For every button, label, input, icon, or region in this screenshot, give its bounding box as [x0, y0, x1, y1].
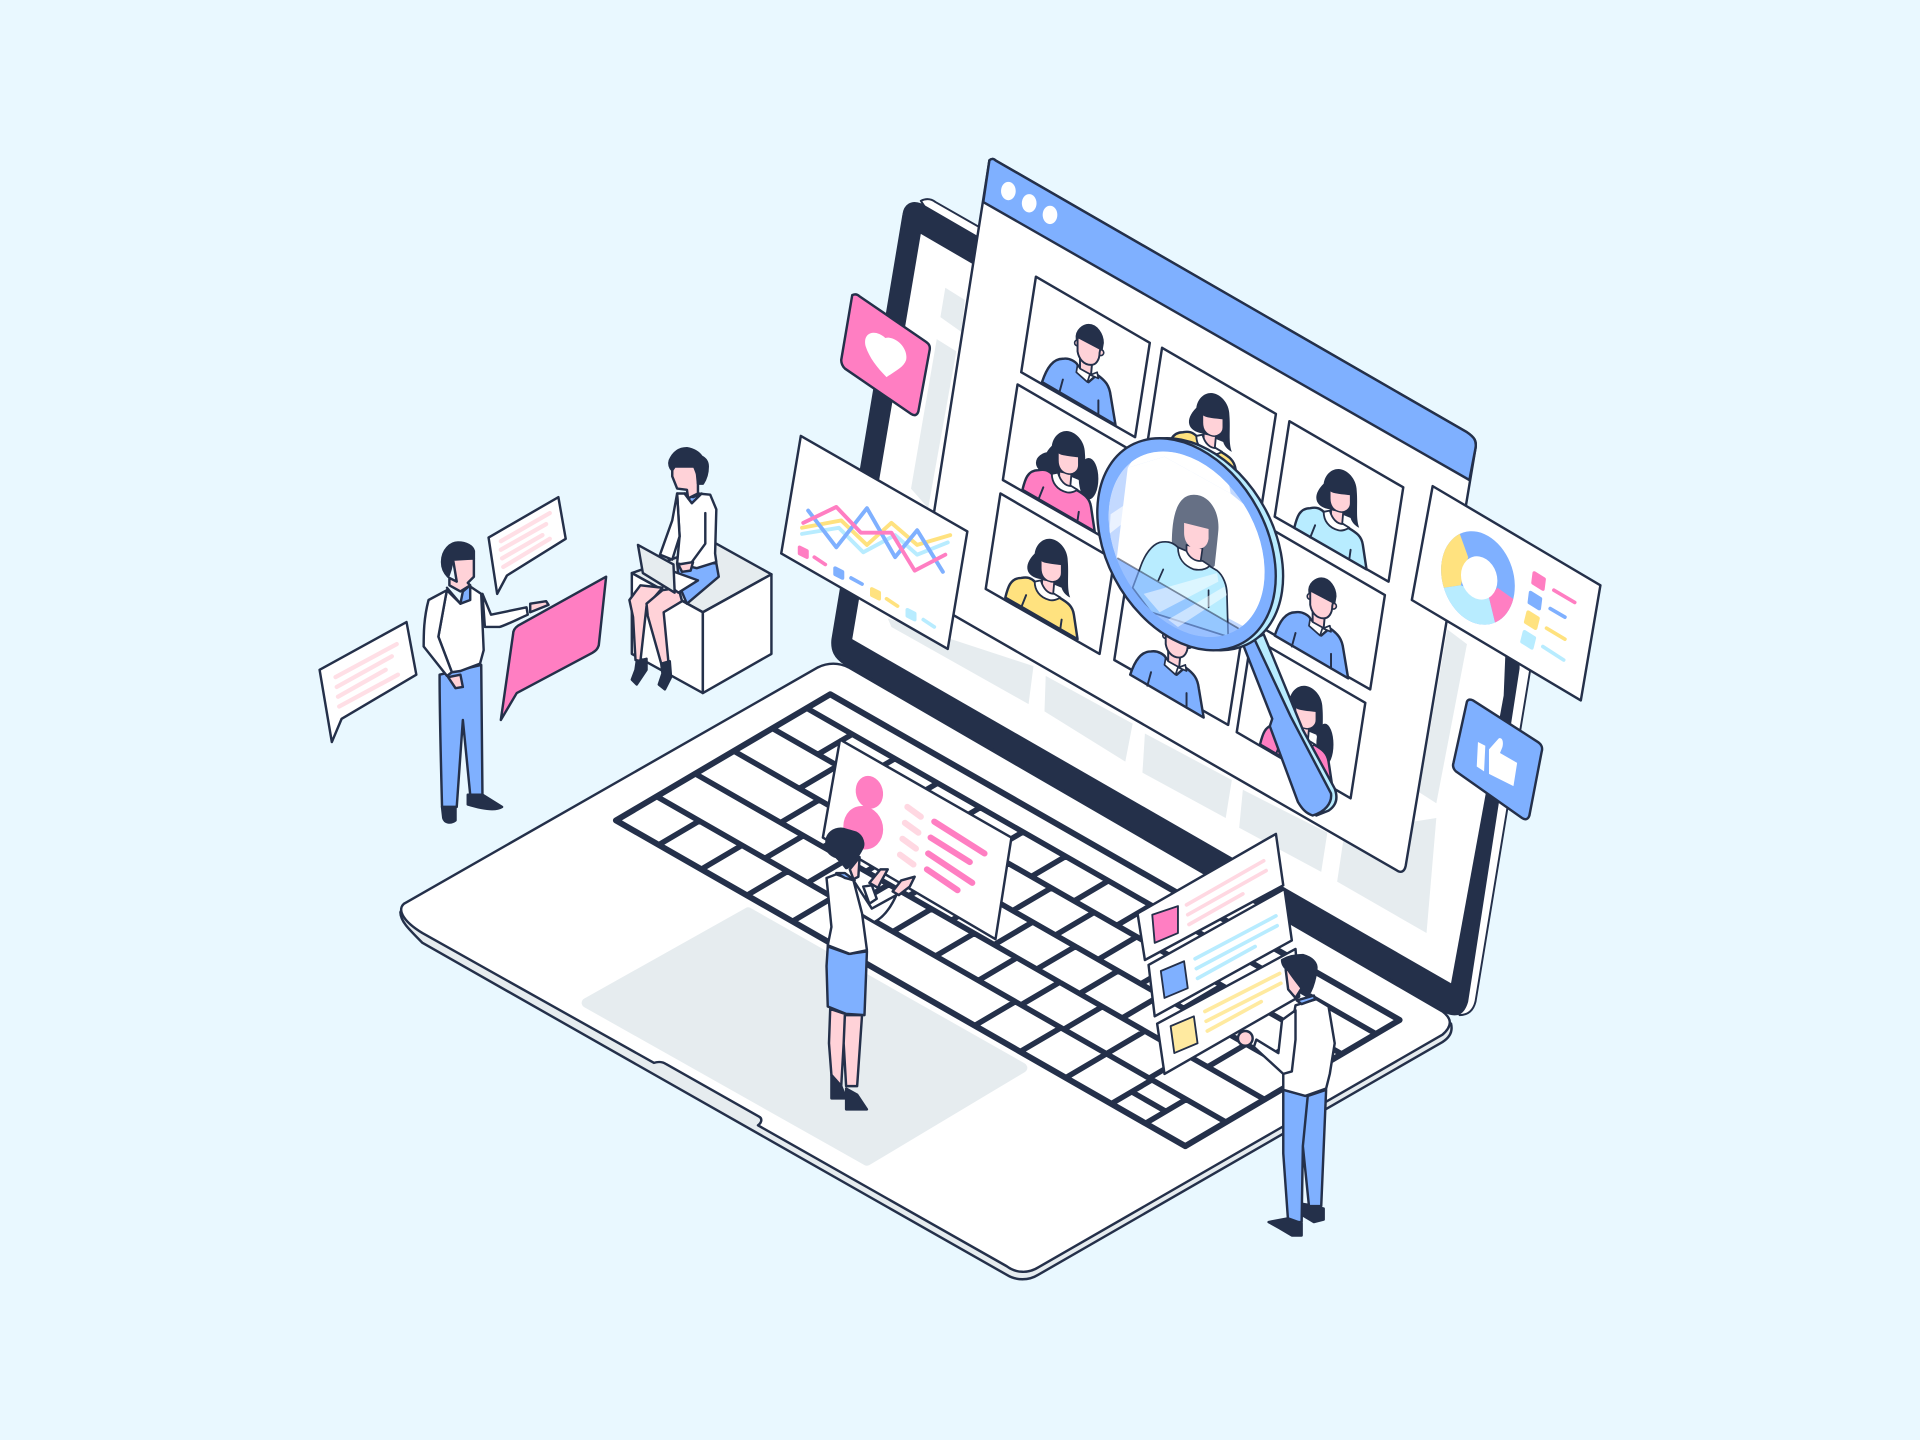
back shoe [1302, 1204, 1324, 1222]
laptop screen [832, 199, 1531, 1015]
right hand [530, 601, 549, 612]
collar [447, 585, 470, 604]
keyboard [616, 694, 1400, 1146]
cube [632, 544, 771, 693]
right arm [482, 594, 528, 627]
placeholder blocks on screen [888, 288, 1467, 933]
pink speech bubble [501, 577, 606, 720]
right sleeve [692, 513, 705, 562]
hair [826, 829, 863, 868]
neck and face [850, 857, 860, 879]
video tile 7 [1114, 564, 1243, 725]
video tile 2 [1147, 348, 1276, 508]
heart card [841, 294, 930, 415]
donut chart card [1412, 486, 1600, 700]
browser window [921, 159, 1476, 872]
hands [869, 869, 915, 895]
video tile 8 [1237, 637, 1365, 798]
left arm [424, 590, 452, 676]
donut legend [1522, 573, 1575, 660]
window title bar [983, 159, 1476, 480]
near shoe [659, 661, 671, 689]
person: standing man [424, 542, 549, 823]
pink card [1138, 834, 1283, 960]
left arm [660, 493, 680, 560]
legs [829, 1009, 862, 1086]
lens view [1108, 452, 1265, 637]
window dots [1001, 182, 1057, 224]
left hand [448, 675, 463, 688]
far leg [629, 585, 662, 661]
speech bubble left [320, 622, 416, 742]
video tile 6 [986, 493, 1114, 654]
video tile 1 [1021, 277, 1150, 437]
magnified woman [1133, 495, 1228, 637]
face [672, 463, 698, 498]
hand [1238, 1031, 1253, 1046]
sweater [677, 493, 716, 568]
video tile 4 [1003, 384, 1131, 545]
hair [1282, 955, 1316, 992]
collar [836, 873, 855, 880]
skirt [827, 947, 867, 1015]
video tile 3 [1275, 421, 1403, 582]
face and neck [449, 558, 474, 591]
hair [442, 542, 474, 577]
person: woman at keyboard [826, 829, 915, 1109]
stacked cards [1138, 834, 1299, 1074]
handle [1243, 634, 1336, 816]
hand [678, 562, 693, 572]
icon: heart [865, 333, 906, 377]
line chart card [781, 436, 967, 649]
legs [440, 665, 482, 807]
arm [1254, 1010, 1296, 1074]
back arm [863, 885, 877, 904]
laptop keyboard [669, 571, 698, 593]
person: seated woman [629, 448, 719, 689]
chart lines [802, 507, 950, 572]
shoes [442, 795, 502, 823]
yellow card [1157, 949, 1299, 1074]
profile text lines [900, 807, 984, 890]
torso [1283, 999, 1335, 1096]
collar [1297, 996, 1315, 1004]
icon: thumbs up [1477, 738, 1517, 786]
laptop screen [638, 545, 675, 593]
lens rim [1085, 402, 1296, 686]
laptop base [400, 664, 1452, 1279]
face [1286, 970, 1302, 998]
person: man at keyboard [1238, 955, 1335, 1236]
illustration [318, 158, 1602, 1280]
collar [684, 493, 702, 503]
chart legend [800, 547, 934, 627]
vest [438, 587, 484, 672]
far shoe [632, 659, 647, 684]
profile card on keyboard [823, 740, 1011, 939]
skirt [677, 563, 719, 604]
hair [669, 448, 708, 484]
arm [853, 880, 896, 922]
laptop [400, 199, 1531, 1279]
blue card [1149, 889, 1292, 1016]
front shoe [1269, 1218, 1302, 1236]
near leg [647, 588, 682, 664]
torso [827, 874, 867, 954]
icon: person [837, 773, 889, 855]
donut chart [1441, 531, 1515, 625]
shoes [831, 1075, 867, 1109]
thumbs up card [1453, 700, 1542, 819]
video tile 5 [1256, 529, 1385, 689]
trackpad [587, 912, 1022, 1161]
legs [1283, 1090, 1326, 1222]
speech bubble top [489, 497, 566, 594]
magnifying glass [1096, 437, 1338, 817]
